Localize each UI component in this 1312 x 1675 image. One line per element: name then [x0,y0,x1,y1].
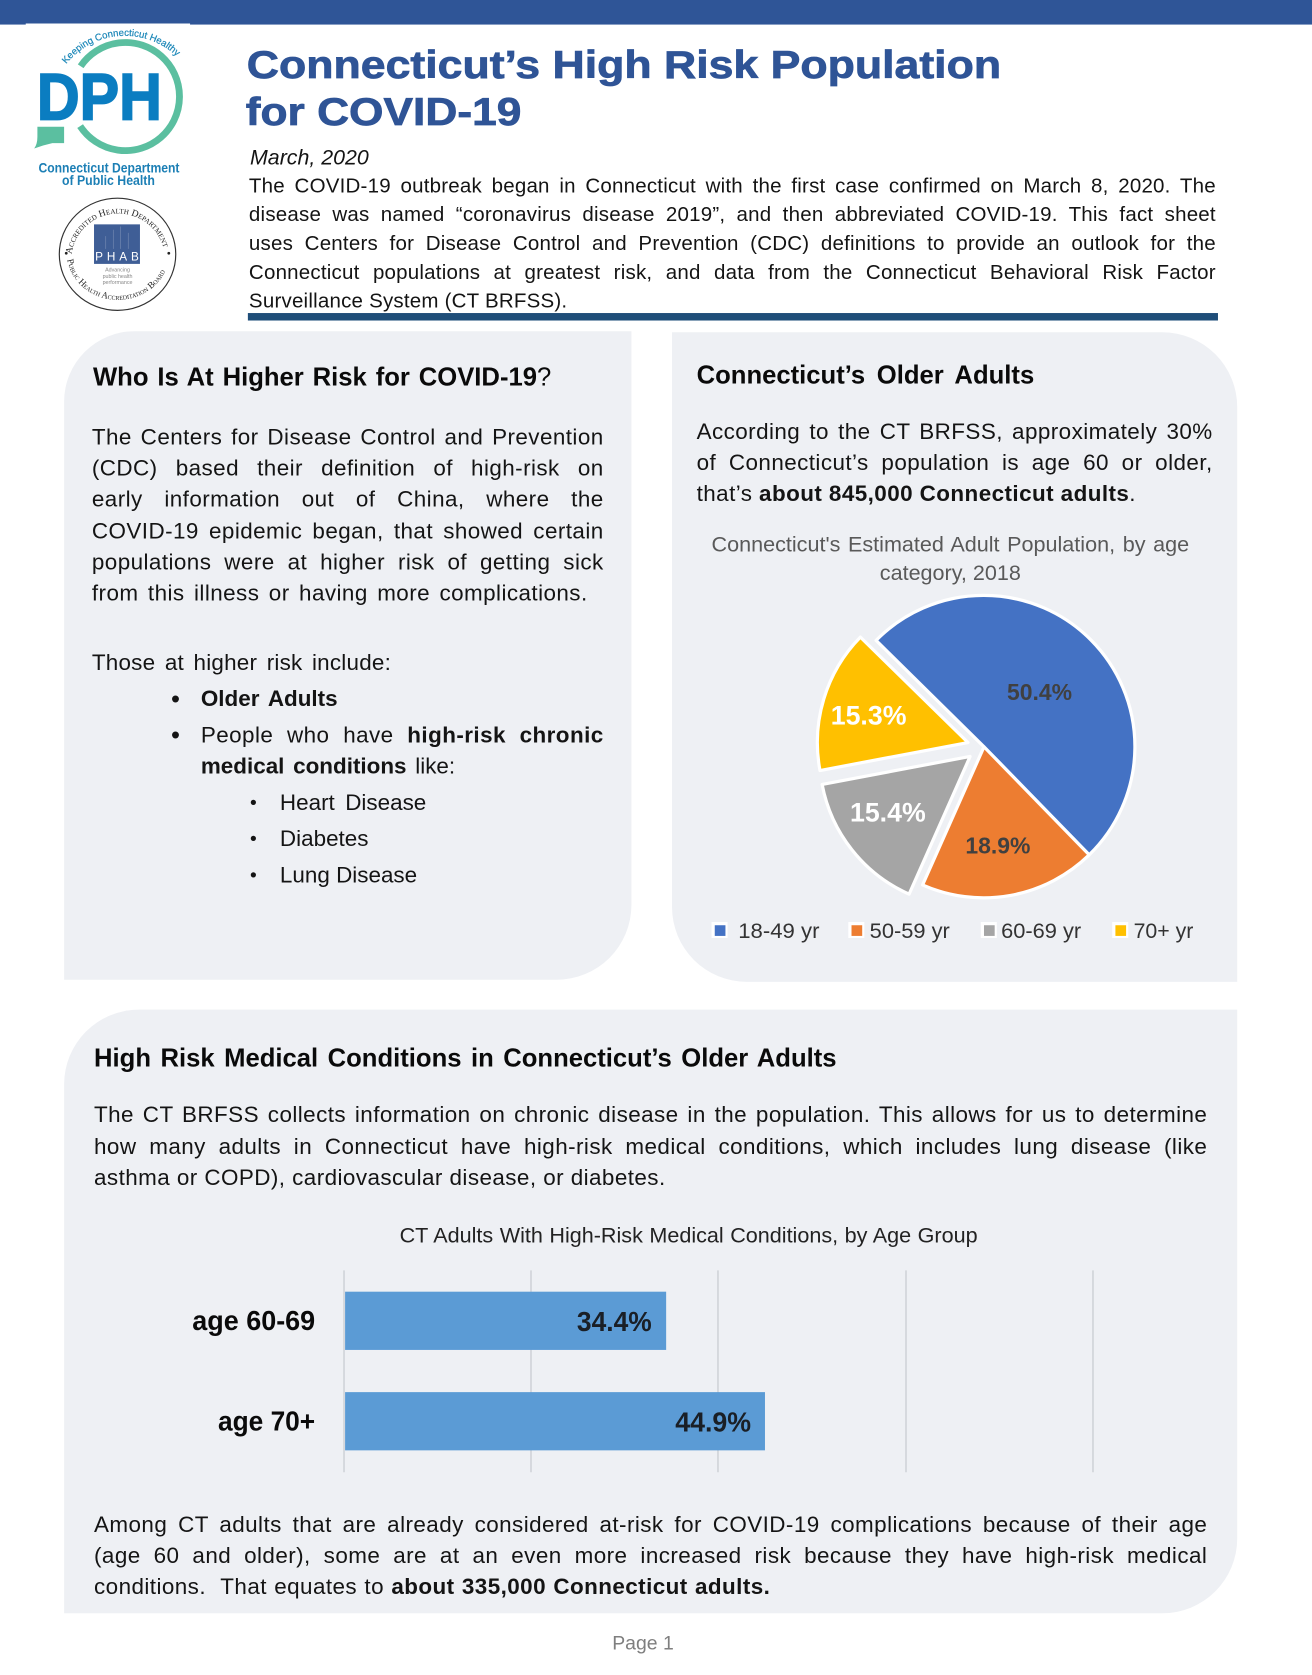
header rule [248,313,1218,321]
intro paragraph [249,175,1216,313]
text: CDC definition: (CDC) based their definition of high-risk on [92,456,604,481]
heading: older adults: Connecticut’s Older Adults [697,361,1034,389]
text: BRFSS chronic disease: The CT BRFSS collects information on chronic disease in the population. This allows for us to determine [94,1103,1207,1127]
logo: Connecticut DPH [26,24,190,188]
bar: age 60-69 [192,1292,666,1350]
pie legend [712,919,1193,943]
text: older adults share: According to the CT BRFSS, approximately 30% [697,420,1213,444]
slice: 50-59 yr [923,747,1089,898]
panel: high risk medical conditions [64,1010,1237,1613]
logo: PHAB accreditation seal: Accredited Health Department [66,208,168,254]
text: those at higher risk: Those at higher risk include: [92,651,391,675]
panel: who is at higher risk [64,331,631,980]
intro paragraph: disease was named “coronavirus disease 2019”, and then abbreviated COVID-19. This fact sheet [249,204,1216,227]
text: CDC definition [92,425,604,606]
list: higher risk groups: • [250,864,257,885]
pie legend: 50-59 yr [870,919,950,943]
bar: age 70+ [218,1392,765,1450]
list: higher risk groups: • [171,684,180,713]
logo: PHAB accreditation seal [58,198,176,311]
list: higher risk groups: • [171,721,180,749]
page number: Page 1 [612,1632,674,1653]
slice: 70+ yr [817,637,968,771]
title: for COVID-19 [246,91,521,134]
pie chart: adult population by age: 18.9% [965,833,1030,859]
bar chart: high-risk conditions by age group [192,1270,1094,1472]
text: at-risk conclusion [94,1512,1207,1600]
list: higher risk groups: • [250,791,257,813]
logo: Connecticut DPH: DPH [37,61,162,135]
bar: age 70+: 44.9% [675,1407,751,1438]
pie chart: adult population by age: 15.4% [850,798,926,828]
list: higher risk groups: medical conditions like: [201,754,455,778]
bar chart title: CT Adults With High-Risk Medical Conditions, by Age Group [400,1224,978,1247]
pie legend: 60-69 yr [1001,919,1081,943]
text: BRFSS chronic disease: asthma or COPD), cardiovascular disease, or diabetes. [94,1166,666,1190]
list: higher risk groups: Older Adults [201,686,338,711]
text: CDC definition: early information out of China, where the [92,487,604,512]
text: CDC definition: The Centers for Disease Control and Prevention [92,425,604,449]
text: CDC definition: populations were at higher risk of getting sick [92,550,604,575]
text: BRFSS chronic disease: how many adults in Connecticut have high-risk medical conditions, which includes lung disease (like [94,1134,1207,1159]
pie chart title: Connecticut's Estimated Adult Population, by age [712,533,1189,557]
list: higher risk groups: Heart Disease [280,790,426,815]
panel: older adults [672,332,1237,982]
intro paragraph: Surveillance System (CT BRFSS). [249,291,567,313]
text: CDC definition: COVID-19 epidemic began, that showed certain [92,519,604,543]
logo: PHAB accreditation seal: Public Health Accreditation Board [67,258,164,300]
pie legend: 70+ yr [1134,919,1193,943]
logo: PHAB accreditation seal: performance [103,280,133,286]
bar: age 60-69: age 60-69 [192,1305,315,1336]
text: at-risk conclusion: Among CT adults that are already considered at-risk for COVID-19 complications because of their age [94,1512,1207,1537]
title [246,44,1001,134]
list: higher risk groups: People who have high-risk chronic [201,723,604,747]
list: higher risk groups: Diabetes [280,826,368,851]
heading: who is at higher risk: Who Is At Higher Risk for COVID-19? [93,363,551,392]
pie chart title [712,533,1189,585]
logo: PHAB accreditation seal: PHAB [95,251,139,264]
text: older adults share: of Connecticut’s population is age 60 or older, [697,451,1213,475]
title: Connecticut’s High Risk Population [247,44,1001,87]
pie chart: adult population by age: 50.4% [1007,679,1072,705]
logo: Connecticut DPH: of Public Health [62,172,155,188]
list: higher risk groups [171,684,604,887]
intro paragraph: The COVID-19 outbreak began in Connecticut with the first case confirmed on March 8, 2020. The [249,175,1216,198]
list: higher risk groups: Lung Disease [280,863,417,887]
pie legend: 18-49 yr [738,919,819,943]
list: higher risk groups: • [250,827,257,849]
text: older adults share [696,420,1213,507]
logo: PHAB accreditation seal: public health [103,274,133,280]
bar: age 60-69: 34.4% [577,1306,652,1337]
slice: 60-69 yr [822,756,970,894]
date: March, 2020 [250,146,369,170]
text: at-risk conclusion: (age 60 and older), some are at an even more increased risk because they have high-risk medical [94,1544,1207,1568]
text: older adults share: that’s about 845,000 Connecticut adults. [697,482,1136,507]
text: BRFSS chronic disease [94,1103,1207,1190]
logo: PHAB accreditation seal: Advancing [105,267,130,273]
logo: Connecticut DPH: Keeping Connecticut Healthy [62,29,180,64]
intro paragraph: Connecticut populations at greatest risk, and data from the Connecticut Behavioral Risk Factor [249,262,1216,284]
pie chart: adult population by age: 15.3% [831,700,907,730]
slice: 18-49 yr [876,595,1135,855]
heading: high risk medical conditions: High Risk Medical Conditions in Connecticut’s Older Adults [94,1043,837,1072]
text: at-risk conclusion: conditions. That equates to about 335,000 Connecticut adults. [94,1575,770,1600]
text: CDC definition: from this illness or having more complications. [92,581,588,606]
bar: age 70+: age 70+ [218,1406,315,1437]
pie chart title: category, 2018 [880,561,1021,585]
top banner [0,0,1312,25]
pie chart: adult population by age [816,594,1136,900]
intro paragraph: uses Centers for Disease Control and Prevention (CDC) definitions to provide an outlook for the [249,233,1216,256]
